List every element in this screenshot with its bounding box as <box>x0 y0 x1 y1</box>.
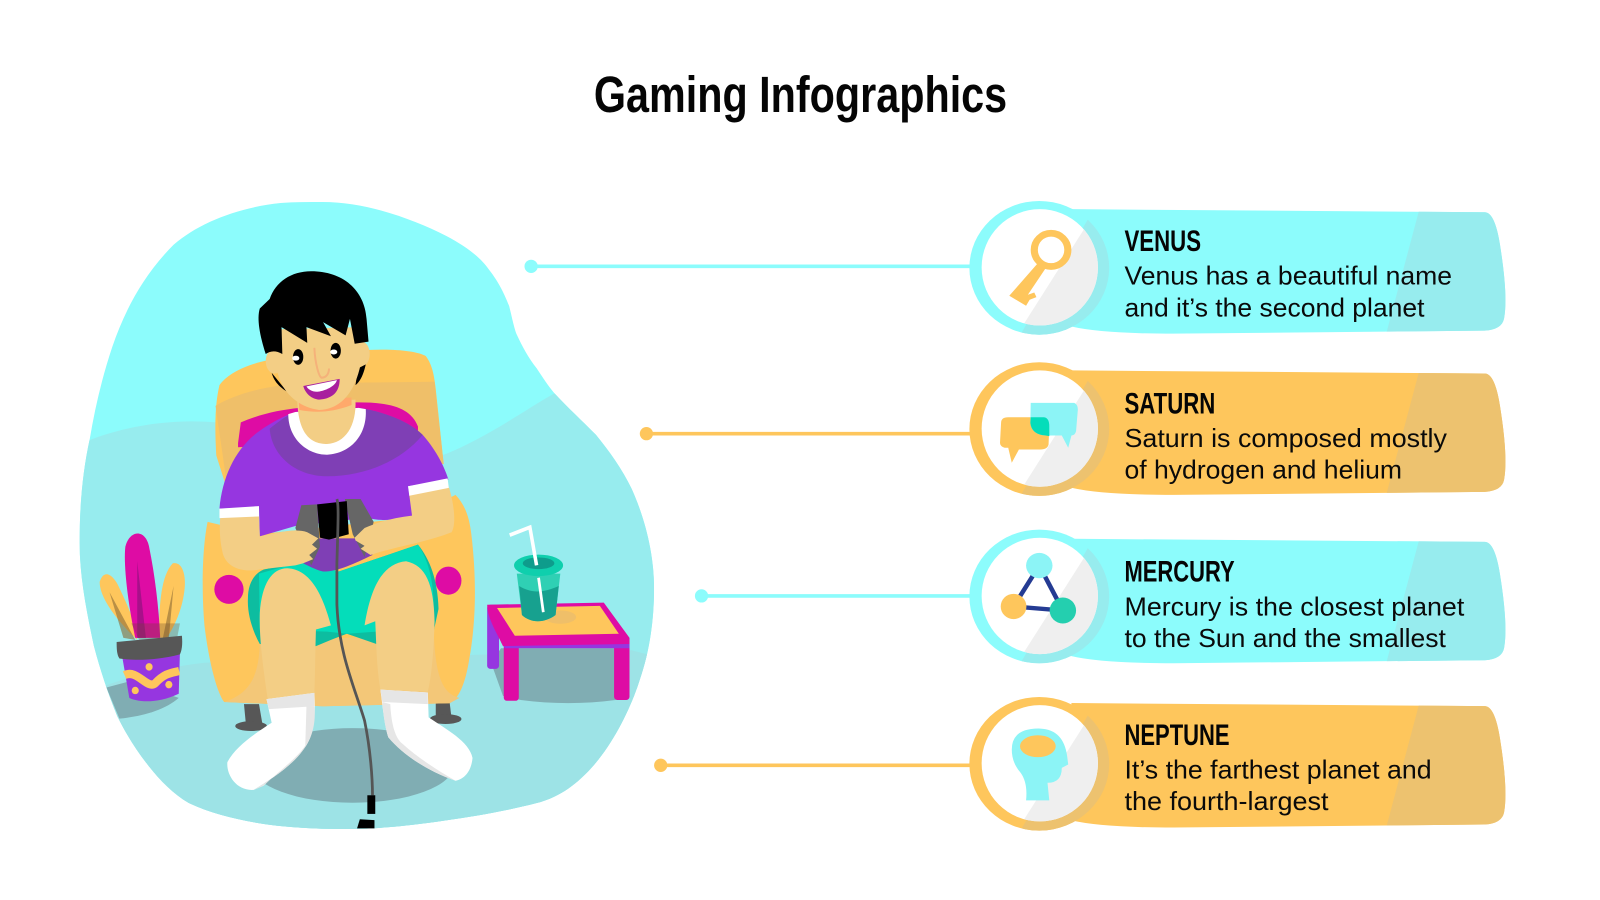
connector line: Neptune <box>654 759 971 772</box>
icon: speech bubbles <box>1000 403 1078 463</box>
connector line: Saturn <box>640 427 971 440</box>
icon circle <box>969 201 1109 335</box>
description: Mercury is the closest planet <box>1124 593 1464 621</box>
illustration: gamer on armchair <box>70 194 663 837</box>
figure artwork <box>100 271 630 828</box>
heading: VENUS <box>1124 225 1201 258</box>
panel: Mercury <box>969 530 1505 663</box>
armchair base <box>203 495 475 706</box>
left arm <box>219 506 318 570</box>
controller <box>295 499 374 565</box>
description: of hydrogen and helium <box>1124 457 1402 485</box>
shorts <box>248 545 439 646</box>
panel: Saturn <box>969 362 1505 496</box>
banner <box>1071 209 1505 334</box>
background blob <box>70 194 663 837</box>
description: It’s the farthest planet and <box>1124 757 1432 785</box>
title: Gaming Infographics <box>594 66 1007 123</box>
description: the fourth-largest <box>1124 788 1329 816</box>
heading: SATURN <box>1124 387 1215 420</box>
panel: Venus <box>969 201 1505 335</box>
shirt <box>219 408 448 572</box>
icon: head with brain <box>1012 729 1068 800</box>
icon circle <box>969 697 1109 831</box>
icon circle <box>969 530 1109 663</box>
description: Venus has a beautiful name <box>1124 263 1452 291</box>
right leg <box>365 561 435 692</box>
chair legs <box>235 702 461 731</box>
table shadow <box>491 648 616 703</box>
banner <box>1071 539 1505 663</box>
heading: MERCURY <box>1124 556 1235 589</box>
banner <box>1071 703 1505 828</box>
icon: network triangle <box>1001 553 1076 623</box>
heading: NEPTUNE <box>1124 719 1230 752</box>
chair knobs <box>214 567 461 604</box>
connector line: Mercury <box>695 589 971 603</box>
description: Saturn is composed mostly <box>1124 425 1447 453</box>
controller cable <box>337 499 375 828</box>
armchair back <box>215 350 444 493</box>
head <box>259 271 370 410</box>
foot shadow <box>252 728 454 803</box>
right arm <box>355 478 454 555</box>
icon: key <box>1009 233 1068 306</box>
connector line: Venus <box>524 260 971 273</box>
icon circle <box>969 362 1109 496</box>
socks <box>227 690 473 790</box>
description: and it’s the second planet <box>1124 294 1424 322</box>
panel: Neptune <box>969 697 1505 831</box>
side table with cup <box>487 527 630 701</box>
plant in pot <box>100 533 185 701</box>
banner <box>1071 370 1505 495</box>
left leg <box>260 568 331 699</box>
description: to the Sun and the smallest <box>1124 625 1446 653</box>
neck and collar <box>288 398 366 455</box>
